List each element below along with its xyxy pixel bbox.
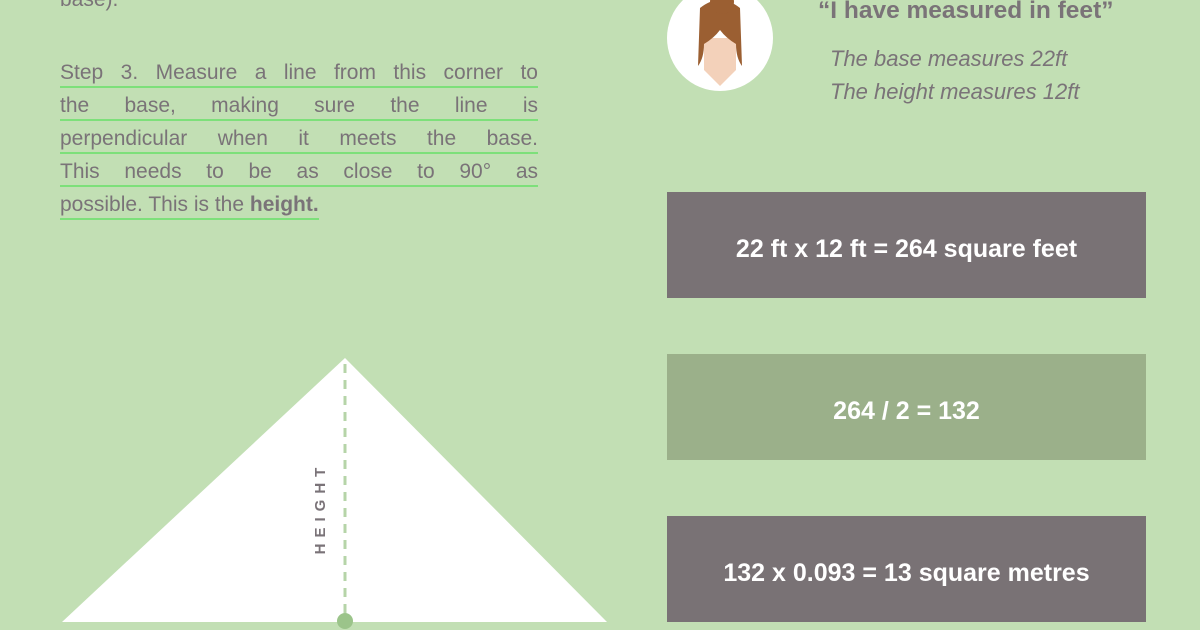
- text: step 3: possible. This is the height.: [60, 193, 319, 216]
- text: step 3: Step 3. Measure a line from this corner to: [60, 61, 538, 84]
- text: measurements: [830, 46, 1080, 104]
- box: calculation 1: [667, 192, 1146, 298]
- text: step 3: perpendicular when it meets the base.: [60, 127, 538, 150]
- text: measurements: The height measures 12ft: [830, 79, 1079, 104]
- icon: woman avatar: [667, 0, 773, 91]
- box: calculation 2: [667, 354, 1146, 460]
- box: calculation 3: 132 x 0.093 = 13 square metres: [723, 558, 1090, 586]
- text: step 3: This needs to be as close to 90° as: [60, 160, 538, 183]
- diagram: triangle with height: [62, 358, 607, 629]
- diagram: triangle with height: HEIGHT: [312, 462, 329, 554]
- box: calculation 3: [667, 516, 1146, 622]
- text: measurements: The base measures 22ft: [830, 46, 1067, 71]
- text: step 3: the base, making sure the line is: [60, 94, 538, 117]
- box: calculation 2: 264 / 2 = 132: [833, 396, 980, 424]
- text: step 3: [60, 61, 538, 220]
- box: calculation 1: 22 ft x 12 ft = 264 square feet: [736, 234, 1077, 262]
